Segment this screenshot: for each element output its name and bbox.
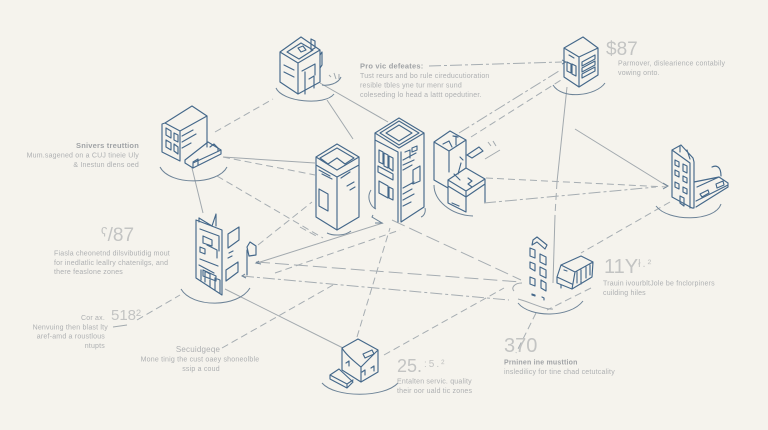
- building: top left: [276, 37, 341, 101]
- stat: 25: 25.: [397, 356, 422, 376]
- text: secuidgeqe: [141, 345, 259, 373]
- text: servers: & Inestun dlens oed: [73, 162, 139, 169]
- stat: 370: Prninen ine musttion: [504, 360, 578, 366]
- tower with bus: [513, 237, 593, 314]
- stat: 518: 518²: [111, 307, 141, 324]
- stat: 11Y: [603, 256, 715, 297]
- building: bottom: [322, 339, 398, 394]
- stat: 25: their oor uald tic zones: [397, 388, 473, 395]
- stat: /87: ˤ/87: [101, 225, 134, 246]
- stat: $87 top: $87: [606, 39, 638, 60]
- text: servers: Snivers treuttion: [76, 141, 139, 150]
- text: provider defeats: [360, 62, 490, 99]
- stat: 518: aref-amd a roustlous: [37, 334, 105, 340]
- stat: 11Y: 11Y: [604, 256, 638, 278]
- stat: /87: for inedlatlic leallry chatenilgs, and: [54, 260, 168, 267]
- connector network: [113, 60, 670, 355]
- stat: 518: Cor ax.: [81, 315, 105, 322]
- stat: 370: [504, 335, 615, 376]
- text: provider defeats: resible tbles yne tur menr sund: [360, 82, 462, 90]
- building: right: [656, 145, 728, 218]
- stat: 25: :5.²: [424, 359, 446, 370]
- text: provider defeats: Tust reurs and bo rule cireducutioration: [360, 73, 490, 80]
- stat: 370: insledilicy for tine chad cetutcality: [504, 369, 615, 376]
- stat: /87: there feaslone zones: [54, 269, 123, 276]
- stat: /87: Fiasla cheonetnd dilsvibutidig mout: [54, 250, 170, 258]
- stat: 518: ntupts: [85, 343, 105, 350]
- building: center left: [316, 144, 359, 235]
- stat: 518: [33, 307, 141, 350]
- text: provider defeats: coleseding lo head a lattt opedutiner.: [360, 92, 482, 99]
- text: secuidgeqe: Mone tinig the cust oaey shoneolble: [141, 356, 259, 364]
- text: provider defeats: Pro vic defeates:: [360, 62, 423, 70]
- text: secuidgeqe: Secuidgeqe: [176, 345, 220, 354]
- stat: 25: [397, 356, 473, 395]
- stat: 518: Nenvuing then blast lty: [33, 324, 108, 332]
- building: center right: [434, 131, 500, 216]
- stat: 25: Entalten servic. quality: [397, 378, 472, 386]
- text: secuidgeqe: ssip a coud: [182, 366, 220, 373]
- text: servers: [27, 141, 139, 169]
- stat: 11Y: Trauin ivourbltJole be fnclorpiners: [603, 280, 715, 288]
- stat: 11Y: ł.²: [638, 258, 653, 270]
- stat: 11Y: cuilding hiles: [603, 290, 646, 297]
- stat: 370: 370: [504, 335, 537, 357]
- building: top right: [553, 37, 605, 95]
- stat: $87 top: Parmover, dislearience contabily: [618, 60, 725, 68]
- text: servers: Mum.sagened on a CUJ tineie Uly: [27, 152, 139, 160]
- building: left: [160, 106, 227, 181]
- building: center tall: [369, 118, 425, 222]
- building: left lower: [181, 214, 256, 303]
- stat: /87: [54, 225, 170, 276]
- stat: $87 top: [606, 39, 725, 77]
- stat: $87 top: vowing onto.: [618, 70, 660, 77]
